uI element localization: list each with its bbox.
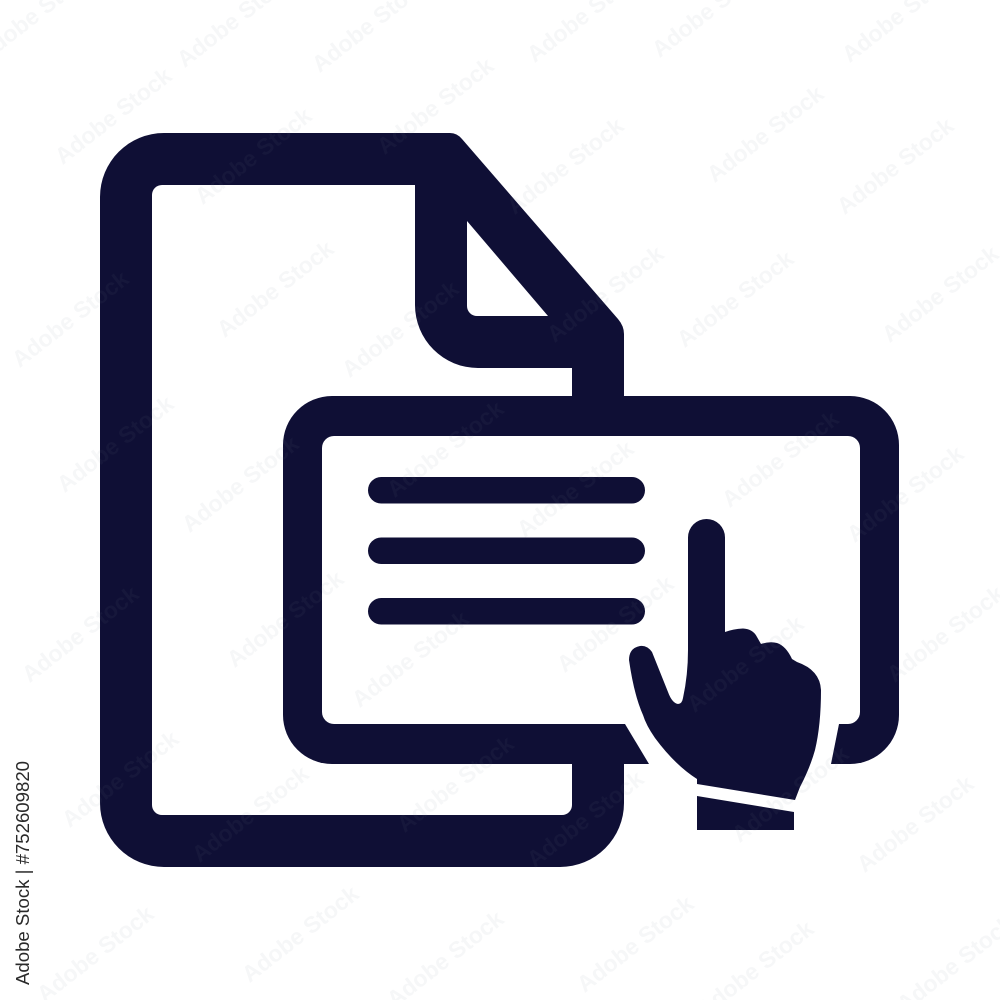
watermark pattern: Adobe Stock bbox=[237, 880, 364, 987]
watermark pattern: Adobe Stock bbox=[212, 235, 339, 342]
icon: pointing hand bbox=[625, 519, 839, 830]
watermark pattern: Adobe Stock bbox=[512, 435, 639, 542]
watermark pattern: Adobe Stock bbox=[222, 565, 349, 672]
hand silhouette bbox=[629, 519, 821, 800]
watermark pattern: Adobe Stock bbox=[337, 275, 464, 382]
watermark pattern: Adobe Stock bbox=[347, 605, 474, 712]
stock id caption: Adobe Stock | #752609820 bbox=[12, 761, 33, 985]
watermark pattern: Adobe Stock bbox=[852, 770, 979, 877]
watermark pattern: Adobe Stock bbox=[702, 80, 829, 187]
text line 1 bbox=[368, 477, 645, 504]
shirt cuff bbox=[697, 796, 794, 830]
panel: card with text lines bbox=[283, 396, 899, 764]
watermark pattern: Adobe Stock bbox=[552, 570, 679, 677]
watermark pattern: Adobe Stock bbox=[877, 240, 1000, 347]
watermark pattern: Adobe Stock bbox=[17, 580, 144, 687]
watermark pattern: Adobe Stock bbox=[502, 112, 629, 219]
watermark pattern: Adobe Stock bbox=[832, 112, 959, 219]
text line 2 bbox=[368, 538, 645, 564]
watermark pattern: Adobe Stock bbox=[190, 102, 317, 209]
watermark pattern: Adobe Stock bbox=[672, 245, 799, 352]
icon: document with folded corner bbox=[100, 133, 624, 867]
watermark pattern: Adobe Stock bbox=[727, 740, 854, 847]
watermark pattern: Adobe Stock bbox=[682, 610, 809, 717]
watermark pattern: Adobe Stock bbox=[372, 52, 499, 159]
watermark pattern: Adobe Stock bbox=[842, 440, 969, 547]
watermark pattern: Adobe Stock bbox=[52, 390, 179, 497]
watermark pattern: Adobe Stock bbox=[57, 725, 184, 832]
watermark pattern: Adobe Stock bbox=[177, 430, 304, 537]
watermark pattern: Adobe Stock bbox=[572, 890, 699, 997]
watermark pattern: Adobe Stock bbox=[382, 395, 509, 502]
watermark pattern: Adobe Stock bbox=[7, 265, 134, 372]
watermark pattern: Adobe Stock bbox=[187, 760, 314, 867]
watermark pattern: Adobe Stock bbox=[50, 62, 177, 169]
watermark pattern: Adobe Stock bbox=[717, 405, 844, 512]
watermark pattern: Adobe Stock bbox=[522, 765, 649, 872]
watermark pattern: Adobe Stock bbox=[542, 240, 669, 347]
watermark pattern: Adobe Stock bbox=[392, 730, 519, 837]
text line 3 bbox=[368, 598, 645, 624]
